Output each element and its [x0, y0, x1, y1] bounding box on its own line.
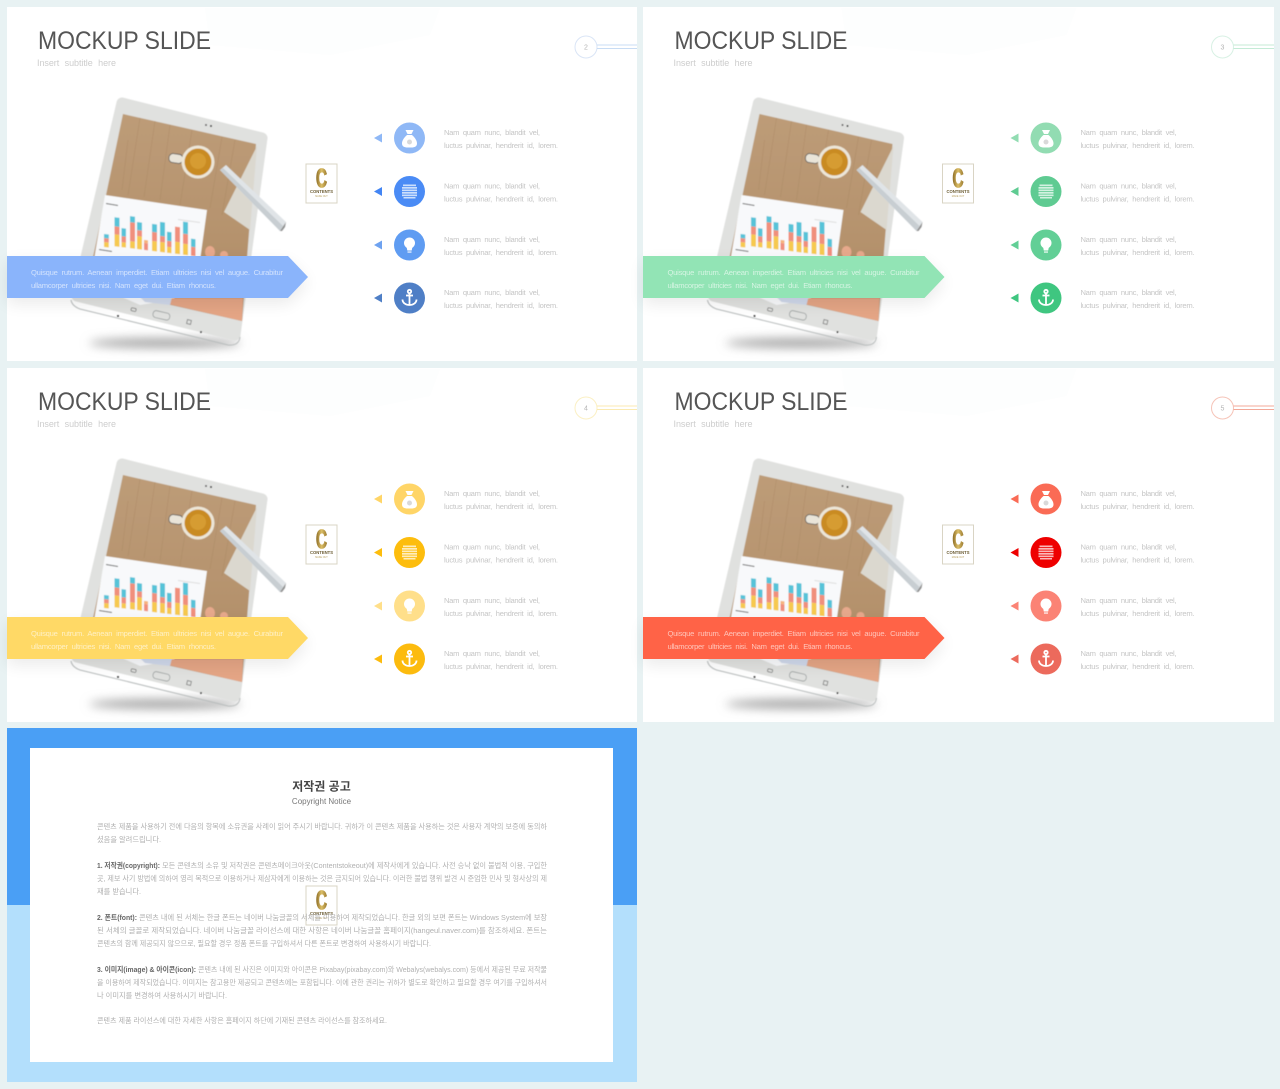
- notice section 3: 을 이용하여 제작되었습니다. 이미지는 참고용만 제공되고 콘텐츠에는 포함됩니다. 이에 관한 권리는 귀하가 별도로 확인하고 필요할 경우 여기를 구입하셔서: [97, 978, 547, 987]
- page number: 5: [1221, 406, 1225, 412]
- arrow banner: [643, 617, 944, 665]
- list item 3: [374, 230, 558, 260]
- title: MOCKUP SLIDE: [38, 27, 211, 55]
- list item 1: [1010, 484, 1194, 514]
- copyright heading: 저작권 공고: [292, 778, 351, 794]
- page number: 2: [584, 44, 588, 52]
- subtitle: Insert subtitle here: [674, 58, 752, 68]
- list item 3: Nam quam nunc, blandit vel,: [444, 596, 540, 605]
- list item 2: luctus pulvinar, hendrerit id, lorem.: [444, 556, 558, 564]
- list item 3: Nam quam nunc, blandit vel,: [1080, 596, 1176, 605]
- list item 1: Nam quam nunc, blandit vel,: [1080, 489, 1176, 498]
- list item 4: [1010, 282, 1194, 314]
- logo: CONTENTS: [310, 911, 333, 916]
- tablet mockup: [71, 464, 286, 709]
- logo: [306, 524, 337, 564]
- tablet mockup: [71, 103, 286, 348]
- list item 1: luctus pulvinar, hendrerit id, lorem.: [1080, 502, 1194, 511]
- list item 3: [1010, 590, 1194, 622]
- logo: CONTENTS: [946, 189, 970, 194]
- notice section 3: 3. 이미지(image) & 아이콘(icon):: [97, 965, 196, 974]
- list item 4: luctus pulvinar, hendrerit id, lorem.: [1080, 662, 1194, 671]
- list item 3: Nam quam nunc, blandit vel,: [1080, 235, 1176, 244]
- list item 4: Nam quam nunc, blandit vel,: [1080, 288, 1176, 297]
- logo: MAKE OUT: [315, 556, 328, 559]
- notice section 3: 나 이미지를 변경하여 사용하시기 바랍니다.: [97, 991, 227, 1000]
- panel: green slide: [643, 7, 1274, 361]
- title: MOCKUP SLIDE: [674, 388, 848, 416]
- list item 3: Nam quam nunc, blandit vel,: [444, 235, 540, 244]
- logo: [306, 885, 337, 925]
- list item 2: [374, 537, 558, 568]
- notice intro: [97, 822, 547, 844]
- logo: CONTENTS: [310, 189, 333, 194]
- arrow banner: Quisque rutrum. Aenean imperdiet. Etiam ultricies nisi vel augue. Curabitur: [31, 629, 283, 638]
- list item 4: Nam quam nunc, blandit vel,: [444, 649, 540, 658]
- list item 1: [374, 122, 558, 154]
- logo: MAKE OUT: [315, 917, 328, 920]
- logo: [942, 163, 974, 203]
- panel: copyright notice: [7, 728, 637, 1082]
- list item 2: luctus pulvinar, hendrerit id, lorem.: [444, 194, 558, 204]
- notice section 2: 콘텐츠의 함께 제공되지 않으므로, 필요할 경우 정품 폰트를 구입하셔서 다른 폰트로 변경하여 사용하시기 바랍니다.: [97, 939, 431, 948]
- subtitle: Insert subtitle here: [37, 419, 116, 429]
- notice section 3: [97, 965, 547, 1000]
- notice section 1: [97, 861, 547, 896]
- arrow banner: [7, 617, 308, 665]
- tablet mockup: [708, 464, 922, 709]
- list item 4: Nam quam nunc, blandit vel,: [444, 288, 540, 297]
- list item 1: luctus pulvinar, hendrerit id, lorem.: [1080, 141, 1194, 150]
- notice intro: 셨음을 알려드립니다.: [97, 835, 161, 844]
- notice intro: 콘텐츠 제품을 사용하기 전에 다음의 항목에 소유권을 사례이 읽어 주시기 바랍니다. 귀하가 이 콘텐츠 제품을 사용하는 것은 사용자 계약의 보증에 동의하: [97, 822, 547, 831]
- list item 3: luctus pulvinar, hendrerit id, lorem.: [1080, 248, 1194, 257]
- arrow banner: ullamcorper ultricies nisi. Nam eget dui. Etiam rhoncus.: [31, 642, 216, 651]
- list item 4: Nam quam nunc, blandit vel,: [1080, 649, 1176, 658]
- logo: C: [952, 524, 964, 554]
- arrow banner: ullamcorper ultricies nisi. Nam eget dui. Etiam rhoncus.: [668, 642, 853, 651]
- list item 1: [1010, 122, 1194, 154]
- notice section 1: 재를 받습니다.: [97, 887, 141, 896]
- notice section 2: 2. 폰트(font):: [97, 913, 137, 922]
- list item 4: luctus pulvinar, hendrerit id, lorem.: [444, 301, 558, 310]
- list item 3: [374, 590, 558, 622]
- notice section 2: 된 서체의 글꼴로 제작되었습니다. 네이버 나눔글꼴 라이선스에 대한 사항은 네이버 나눔글꼴 홈페이지(hangeul.naver.com)를 참조하세요. 폰트는: [97, 926, 547, 935]
- copyright subheading: Copyright Notice: [292, 797, 352, 806]
- list item 2: [1010, 176, 1194, 207]
- notice section 1: 1. 저작권(copyright):: [97, 861, 160, 870]
- list item 4: [374, 644, 558, 674]
- list item 1: Nam quam nunc, blandit vel,: [444, 489, 540, 498]
- list item 1: Nam quam nunc, blandit vel,: [1080, 128, 1176, 137]
- title: MOCKUP SLIDE: [674, 27, 848, 55]
- list item 1: [374, 484, 558, 514]
- logo: MAKE OUT: [952, 556, 965, 559]
- page number: [575, 397, 637, 419]
- list item 3: [1010, 230, 1194, 260]
- arrow banner: Quisque rutrum. Aenean imperdiet. Etiam ultricies nisi vel augue. Curabitur: [668, 268, 920, 277]
- page number: 3: [1221, 44, 1225, 52]
- list item 2: [1010, 537, 1194, 568]
- panel: red slide: [643, 368, 1274, 722]
- list item 2: Nam quam nunc, blandit vel,: [1080, 542, 1176, 552]
- list item 3: luctus pulvinar, hendrerit id, lorem.: [1080, 609, 1194, 618]
- page number: [1212, 36, 1274, 58]
- list item 2: [374, 176, 558, 207]
- logo: CONTENTS: [310, 550, 333, 555]
- logo: C: [316, 163, 327, 193]
- list item 4: [374, 282, 558, 314]
- arrow banner: Quisque rutrum. Aenean imperdiet. Etiam ultricies nisi vel augue. Curabitur: [668, 629, 920, 638]
- logo: MAKE OUT: [315, 195, 328, 198]
- list item 3: luctus pulvinar, hendrerit id, lorem.: [444, 609, 558, 618]
- list item 2: luctus pulvinar, hendrerit id, lorem.: [1080, 194, 1194, 204]
- subtitle: Insert subtitle here: [674, 419, 752, 429]
- logo: C: [316, 524, 327, 554]
- list item 2: luctus pulvinar, hendrerit id, lorem.: [1080, 556, 1194, 564]
- logo: MAKE OUT: [952, 195, 965, 198]
- list item 4: luctus pulvinar, hendrerit id, lorem.: [1080, 301, 1194, 310]
- notice section 3: 콘텐츠 내에 된 사진은 이미지와 아이콘은 Pixabay(pixabay.com)와 Webalys(webalys.com) 등에서 제공된 무료 저작물: [198, 965, 547, 974]
- list item 4: luctus pulvinar, hendrerit id, lorem.: [444, 662, 558, 671]
- list item 2: Nam quam nunc, blandit vel,: [444, 182, 540, 190]
- logo: [942, 524, 974, 564]
- notice footer: 콘텐츠 제품 라이선스에 대한 자세한 사항은 홈페이지 하단에 기재된 콘텐츠 라이선스를 참조하세요.: [97, 1016, 387, 1025]
- list item 1: luctus pulvinar, hendrerit id, lorem.: [444, 141, 558, 150]
- list item 2: Nam quam nunc, blandit vel,: [1080, 182, 1176, 190]
- subtitle: Insert subtitle here: [37, 58, 116, 68]
- notice section 2: 콘텐츠 내에 된 서체는 한글 폰트는 네이버 나눔글꼴의 서체를 이용하여 제작되었습니다. 한글 외의 보편 폰트는 Windows System에 보장: [139, 913, 547, 922]
- logo: C: [952, 163, 964, 193]
- arrow banner: [7, 256, 308, 304]
- logo: [306, 163, 337, 203]
- arrow banner: Quisque rutrum. Aenean imperdiet. Etiam ultricies nisi vel augue. Curabitur: [31, 268, 283, 277]
- arrow banner: ullamcorper ultricies nisi. Nam eget dui. Etiam rhoncus.: [668, 281, 853, 290]
- list item 4: [1010, 644, 1194, 674]
- arrow banner: [643, 256, 944, 304]
- notice section 1: 모든 콘텐츠의 소유 및 저작권은 콘텐츠메이크아웃(Contentstokeout)에 제작사에게 있습니다. 사전 승낙 없이 불법적 이용, 구입한: [162, 861, 547, 870]
- list item 1: luctus pulvinar, hendrerit id, lorem.: [444, 502, 558, 511]
- page number: 4: [584, 406, 588, 412]
- title: MOCKUP SLIDE: [38, 388, 211, 416]
- logo: C: [316, 885, 327, 915]
- notice section 1: 곳, 제보 사기 방법에 의하여 영리 목적으로 이용하거나 제삼자에게 이용하는 것은 금지되어 있습니다. 이러한 불법 행위 발견 시 준엄한 민사 및 형사상의 제: [97, 874, 547, 883]
- panel: blue slide: [7, 7, 637, 361]
- panel: yellow slide: [7, 368, 637, 722]
- list item 1: Nam quam nunc, blandit vel,: [444, 128, 540, 137]
- logo: CONTENTS: [946, 550, 970, 555]
- list item 3: luctus pulvinar, hendrerit id, lorem.: [444, 248, 558, 257]
- page number: [575, 36, 637, 58]
- arrow banner: ullamcorper ultricies nisi. Nam eget dui. Etiam rhoncus.: [31, 281, 216, 290]
- tablet mockup: [708, 103, 922, 348]
- notice section 2: [97, 913, 547, 948]
- list item 2: Nam quam nunc, blandit vel,: [444, 542, 540, 552]
- page number: [1212, 397, 1274, 419]
